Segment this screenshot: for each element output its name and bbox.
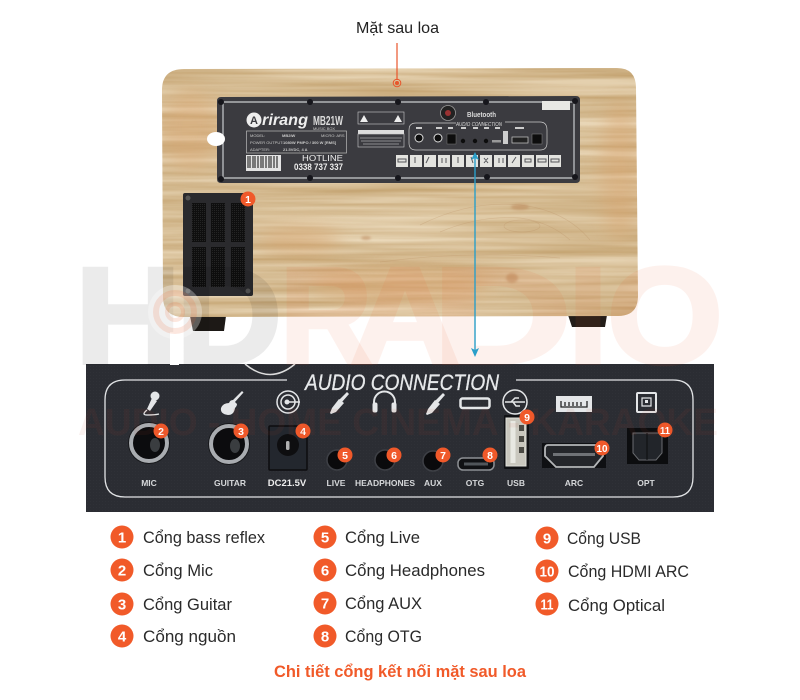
icon: USB-A socket [556, 396, 592, 412]
item 5 [314, 526, 420, 548]
port number badges: 11 [660, 425, 670, 437]
icon: guitar [221, 391, 244, 415]
port: AUX [423, 451, 443, 471]
watermark: HD RADIO: A [350, 240, 460, 393]
blue arrow to detail panel [471, 152, 479, 357]
icon: optical [637, 393, 656, 412]
port labels: LIVE [327, 478, 346, 488]
feature icon row [396, 155, 561, 167]
knob fragment [245, 364, 295, 374]
item 4 [110, 624, 236, 648]
item 5: 5 [321, 530, 329, 546]
item 2: Cổng Mic [143, 561, 213, 580]
rear control plate [217, 96, 580, 183]
item 3 [110, 592, 232, 616]
item 8 [314, 624, 422, 648]
watermark: HD RADIO: D [432, 240, 572, 393]
heading: Mặt sau loa: Mặt sau loa [356, 20, 439, 37]
port number badges: 4 [300, 426, 306, 438]
port number badges: 9 [524, 412, 530, 424]
port: LIVE [327, 450, 347, 470]
item 10: 10 [540, 564, 554, 580]
hotline: 0338 737 337 [294, 162, 343, 172]
panel heading: AUDIO CONNECTION [303, 370, 499, 395]
volume knob and Bluetooth: Bluetooth [467, 112, 496, 119]
item 10: Cổng HDMI ARC [568, 562, 689, 581]
icon: USB-C [460, 398, 490, 408]
legend [110, 526, 689, 648]
item 9: 9 [543, 530, 551, 548]
port: HEADPHONES [375, 450, 395, 470]
port number badges: 2 [158, 426, 164, 438]
item 7 [314, 592, 422, 614]
specification box: MB2iW [282, 133, 296, 138]
port labels: GUITAR [214, 478, 246, 488]
specification box [246, 131, 346, 153]
watermark: HD RADIO: I [568, 240, 608, 393]
connection detail panel [86, 364, 714, 512]
item 9: Cổng USB [567, 529, 641, 548]
port labels: USB [507, 478, 525, 488]
item 8: Cổng OTG [345, 627, 422, 646]
port number badges: 3 [238, 426, 244, 438]
item 1: 1 [118, 530, 126, 546]
specification box: ADAPTER: [250, 147, 270, 152]
icon: power [277, 391, 300, 413]
red pointer to rear panel [393, 43, 401, 87]
port: GUITAR [208, 423, 250, 465]
item 11 [536, 592, 665, 616]
port labels: OPT [637, 478, 656, 488]
port number badges: 7 [440, 450, 446, 462]
port number badges: 6 [391, 450, 397, 462]
item 11: 11 [540, 596, 554, 614]
specification box: MODEL: [250, 133, 265, 138]
port number badges: 8 [487, 450, 493, 462]
watermark: HD RADIO: AUDIO - HOME CINEMA - KARAOKE [78, 402, 718, 444]
icon: aux plug [426, 393, 445, 415]
item 1: Cổng bass reflex [143, 528, 265, 547]
item 3: Cổng Guitar [143, 595, 232, 614]
port: MIC [128, 422, 170, 464]
icon: live plug [330, 392, 349, 414]
hotline [294, 153, 343, 172]
item 10 [536, 560, 689, 582]
item 3: 3 [118, 596, 126, 614]
watermark: HD RADIO: D [176, 240, 282, 393]
port number badges: 5 [342, 450, 348, 462]
bass reflex vent [183, 193, 253, 296]
mini audio connection panel [409, 122, 547, 150]
item 5: Cổng Live [345, 528, 420, 547]
panel outline [105, 380, 693, 497]
port labels [141, 478, 656, 489]
barcode [246, 155, 281, 171]
specification box: POWER OUTPUT: [250, 140, 283, 145]
port labels: HEADPHONES [355, 478, 415, 488]
item 7: 7 [321, 596, 329, 612]
port: OTG [458, 458, 494, 470]
port: DC power [269, 426, 307, 470]
hotline: HOTLINE [302, 153, 343, 163]
icon: microphone [144, 392, 160, 415]
port labels: AUX [424, 478, 442, 488]
watermark: HD RADIO: O [607, 240, 723, 393]
item 4: 4 [118, 628, 127, 646]
item 1 [110, 526, 265, 548]
Arirang brand logo [246, 112, 343, 131]
item 6 [314, 558, 485, 582]
speaker feet [190, 315, 607, 331]
specification box: MICRO: ARS [321, 133, 345, 138]
mini audio connection panel: AUDIO CONNECTION [455, 122, 502, 128]
watermark: HD RADIO: R [280, 240, 372, 393]
item 6: 6 [321, 562, 329, 580]
watermark: HD RADIO: H [75, 240, 181, 393]
caption: Chi tiết cổng kết nối mặt sau loa [274, 663, 527, 681]
item 2 [110, 558, 213, 582]
speaker rear view [160, 66, 640, 318]
port labels: OTG [466, 478, 485, 488]
volume knob and Bluetooth [440, 106, 496, 120]
port labels: DC21.5V [268, 478, 307, 489]
badge 1: 1 [245, 194, 251, 206]
port number badges: 10 [596, 443, 608, 455]
item 2: 2 [118, 562, 126, 580]
port labels: MIC [141, 478, 157, 488]
port: HDMI [542, 443, 606, 468]
Arirang brand logo: MB21W [313, 113, 343, 128]
Arirang brand logo: A [250, 115, 258, 127]
Arirang brand logo: MUSIC BOX [313, 126, 335, 131]
serial sticker [542, 101, 570, 110]
wooden cabinet [160, 66, 640, 318]
item 9 [536, 526, 641, 550]
port number badges [154, 410, 672, 462]
port labels: ARC [565, 478, 583, 488]
item 6: Cổng Headphones [345, 561, 485, 580]
port: USB [504, 415, 529, 469]
port: OPT [627, 428, 668, 464]
watermark: HD RADIO [75, 240, 723, 444]
cabinet hole [207, 132, 225, 146]
item 7: Cổng AUX [345, 594, 422, 613]
badge 1 [240, 192, 256, 206]
item 8: 8 [321, 628, 329, 646]
Arirang brand logo: rirang [262, 112, 308, 129]
icon: headphones [373, 392, 396, 412]
item 11: Cổng Optical [568, 596, 665, 615]
warning labels [358, 112, 404, 147]
specification box: 21.5VDC, 4 A [283, 147, 308, 152]
specification box: 1080W PMPO / 300 W [RMS] [283, 140, 337, 145]
item 4: Cổng nguồn [143, 627, 236, 646]
icon: USB [503, 390, 527, 414]
